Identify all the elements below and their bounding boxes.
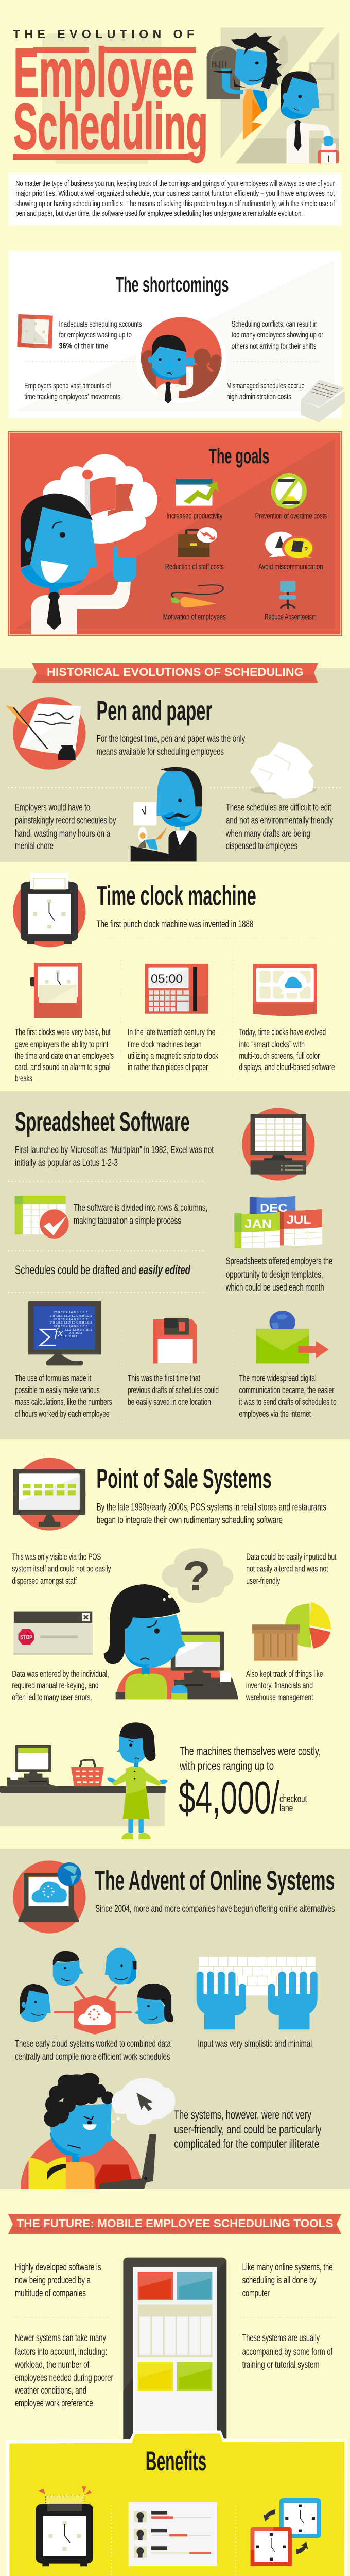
column: formulas: of hours worked by each employee	[15, 1409, 109, 1419]
column: first clocks: card, and sound an alarm to signal	[15, 1062, 111, 1072]
goal: reduction of staff costs: Reduction of staff costs	[165, 563, 224, 571]
intro text: spreadsheet	[15, 1145, 214, 1168]
intro text: pen and paper: For the longest time, pen and paper was the only	[97, 734, 246, 744]
goal: increased productivity: Increased productivity	[167, 512, 222, 521]
column: digital communication: employees via the internet	[239, 1409, 311, 1419]
goal: avoid miscommunication	[258, 532, 323, 571]
column: formulas: 12.9 12.4 14.8 9.8 8.7	[53, 1311, 87, 1314]
icon: tablet with tiles	[123, 2258, 226, 2501]
side text: pen and paper: Employers would have to	[15, 802, 90, 813]
section: point of sale systems	[0, 1458, 337, 1839]
side text: pen and paper	[15, 802, 333, 852]
shortcoming text blocks: Scheduling conflicts, can result in	[232, 320, 318, 329]
heading: pen and paper: Pen and paper	[96, 696, 212, 726]
column: digital communication	[239, 1311, 337, 1419]
illustration: users connected to cloud	[15, 1948, 173, 2062]
shortcoming text blocks	[24, 320, 323, 401]
panel: the goals	[8, 431, 342, 636]
goal: motivation of employees	[163, 585, 226, 622]
icon: stop dialog	[13, 1611, 93, 1655]
column: formulas: 7.8 10.1 11.2 12.9 9.8 10.1	[50, 1315, 92, 1318]
goal: motivation of employees: Motivation of employees	[163, 613, 226, 622]
text: machine costs: checkout	[279, 1793, 307, 1805]
text: right column: computer	[242, 2288, 270, 2299]
text: left column: Newer systems can take many	[15, 2333, 106, 2344]
text: rows and columns: making tabulation a simple process	[74, 1216, 181, 1227]
text: left column: employee work preference.	[15, 2398, 95, 2409]
text: POS drawbacks: inventory, financials and	[246, 1680, 313, 1690]
text: left column: Highly developed software is	[15, 2262, 101, 2273]
column: formulas: 11.2 10.1	[65, 1335, 77, 1338]
column: magnetic strip clocks: time clock machines began	[128, 1039, 202, 1049]
price callout: $4,000/	[179, 1772, 279, 1823]
column: first clocks: gave employers the ability to print	[15, 1039, 108, 1049]
text: POS drawbacks: Data was entered by the individual,	[12, 1669, 109, 1679]
shortcoming text blocks: for employees wasting up to	[59, 331, 132, 340]
column: magnetic strip clocks: 05:00	[151, 972, 183, 986]
intro text	[15, 179, 335, 218]
shortcoming text blocks: time tracking employees’ movements	[24, 393, 120, 401]
column: first clocks: the time and date on an employee’s	[15, 1050, 114, 1061]
text: left column	[14, 2262, 113, 2409]
heading: benefits: Benefits	[146, 2446, 206, 2477]
benefit: reduces unauthorized absences	[32, 2486, 98, 2576]
text: left column: employees needed during poorer	[15, 2372, 113, 2383]
section: time clock machine	[13, 873, 335, 1083]
text: left column: workload, the number of	[14, 2360, 90, 2370]
worker one	[213, 32, 282, 140]
intro text: pen and paper	[97, 734, 246, 757]
text: POS drawbacks: system itself and could not be easily	[12, 1564, 111, 1574]
side text: pen and paper: painstakingly record schedules by	[15, 815, 116, 826]
column: formulas: 12.9 12.4 14.8 9.8 8.7	[53, 1318, 87, 1321]
illustration: shrugging cashier at counter	[0, 1722, 168, 1839]
section: spreadsheet software	[8, 1107, 337, 1429]
banner: historical evolutions of scheduling: HISTORICAL EVOLUTIONS OF SCHEDULING	[47, 666, 304, 679]
side text: pen and paper: when many drafts are being	[225, 828, 310, 839]
shortcoming text blocks: Employers spend vast amounts of	[24, 382, 111, 391]
panel: the shortcomings	[8, 250, 345, 422]
goal: prevention of overtime costs	[255, 475, 327, 521]
shortcoming text blocks: high administration costs	[226, 393, 291, 401]
illustration: clerk at a desk	[130, 767, 202, 861]
illustration: man thinking of a flag	[21, 454, 157, 634]
text: templates	[225, 1256, 332, 1293]
column: magnetic strip clocks	[128, 964, 218, 1072]
text: not user-friendly	[174, 2108, 322, 2150]
heading: the shortcomings: The shortcomings	[116, 273, 229, 296]
text: left column: factors into account, including:	[15, 2347, 107, 2358]
shortcoming text blocks: Mismanaged schedules accrue	[226, 382, 305, 391]
column: formulas: fx	[55, 1326, 63, 1339]
text: POS drawbacks	[12, 1552, 337, 1702]
shortcoming text blocks: Inadequate scheduling accounts	[59, 320, 142, 329]
question mark: ?	[183, 1553, 211, 1600]
section: mobile tools	[13, 2258, 335, 2501]
text: POS drawbacks: warehouse management	[246, 1692, 313, 1702]
icon: table with checkmark	[15, 1196, 69, 1239]
time clock slab	[207, 46, 240, 99]
banner: historical evolutions of scheduling	[32, 663, 318, 683]
illustration: users connected to cloud: centrally and compile more efficient work schedules	[15, 2052, 170, 2062]
text: POS drawbacks: often led to many user errors.	[12, 1692, 92, 1702]
text: POS drawbacks: This was only visible via the POS	[12, 1552, 101, 1562]
text: right column	[242, 2262, 333, 2370]
icon: POS terminal	[13, 1458, 86, 1531]
intro text: spreadsheet: initially as popular as Lotus 1-2-3	[15, 1158, 118, 1168]
column: formulas: possible to easily make various	[15, 1385, 100, 1395]
column: saved drafts: previous drafts of schedules could	[128, 1385, 219, 1395]
heading: the goals: The goals	[209, 444, 270, 468]
illustration: frustrated user at laptop	[21, 2073, 175, 2189]
goal: reduce absenteeism: Reduce Absenteeism	[265, 613, 317, 622]
intro text: pen and paper: means available for scheduling employees	[97, 747, 224, 757]
illustration: pen-and-paper worker versus modern worker	[207, 27, 339, 163]
text: easily edited: Schedules could be drafted and easily edited	[15, 1263, 191, 1277]
column: formulas: 12.9 12.4 14.8 9.8 8.7	[53, 1325, 87, 1328]
side text: pen and paper: hand, wasting many hours on a	[15, 828, 110, 839]
goal: reduction of staff costs	[165, 527, 224, 571]
panel: introduction	[8, 172, 342, 226]
benefit: individual shift schedules	[126, 2502, 224, 2576]
side text: pen and paper: menial chore	[15, 841, 54, 852]
worker two	[281, 71, 339, 163]
column: first clocks: breaks	[15, 1073, 32, 1083]
intro text: spreadsheet: First launched by Microsoft as “Multiplan” in 1982, Excel was not	[15, 1145, 214, 1156]
text: POS drawbacks: user-friendly	[246, 1575, 280, 1586]
title kicker: THE EVOLUTION OF	[13, 27, 194, 41]
icon: worried worker in circle	[136, 314, 226, 403]
illustration: users connected to cloud: These early cloud systems worked to combined data	[15, 2039, 171, 2049]
goal: increased productivity	[167, 479, 222, 521]
column: smart clocks: into “smart clocks” with	[239, 1039, 305, 1049]
text: POS drawbacks: required manual re-keying, and	[12, 1680, 99, 1690]
shortcoming text blocks: others not arriving for their shifts	[232, 342, 316, 351]
goal: reduce absenteeism	[265, 581, 317, 622]
column: formulas: mass calculations, like the numbers	[15, 1397, 112, 1407]
icon: month calendars	[234, 1196, 322, 1249]
icon: month calendars: JUL	[286, 1213, 311, 1226]
column: saved drafts: This was the first time that	[128, 1373, 200, 1383]
goal: avoid miscommunication: Avoid miscommunication	[258, 563, 323, 571]
text: machine costs: with prices ranging up to	[179, 1759, 274, 1772]
column: formulas	[15, 1301, 112, 1419]
illustration: confused cashier with thought cloud	[104, 1548, 238, 1699]
intro text: time clock: The first punch clock machine was invented in 1888	[96, 919, 253, 930]
column: first clocks	[15, 963, 114, 1083]
icon: punch clock	[13, 873, 86, 947]
text: rows and columns	[74, 1202, 207, 1227]
column: formulas: 7.8 10.1 11.2 12.9 9.8 10.1	[50, 1321, 92, 1325]
icon: paper stack	[301, 380, 345, 422]
title main lines	[13, 35, 208, 163]
text: right column: scheduling is all done by	[242, 2275, 317, 2286]
icon: crumpled paper	[250, 742, 317, 799]
banner: the future	[8, 2214, 341, 2234]
section: the advent of online systems	[13, 1860, 335, 2189]
title main lines: Employee	[13, 35, 194, 111]
watermark: clock behind title	[42, 33, 162, 164]
text: left column: multitude of companies	[15, 2288, 86, 2299]
text: machine costs: lane	[279, 1803, 293, 1814]
panel: benefits folder	[6, 2431, 347, 2576]
column: formulas: 11.2 12.9 9.8 10.1	[65, 1329, 92, 1332]
icon: desktop computer with spreadsheet	[242, 1108, 315, 1181]
benefit: trade shifts	[246, 2498, 325, 2576]
text: right column: training or tutorial system	[242, 2360, 320, 2370]
illustration: hands on keyboard	[197, 1957, 318, 2049]
intro text: POS	[97, 1502, 326, 1526]
text: left column: weather conditions, and	[14, 2385, 86, 2396]
column: magnetic strip clocks: In the late twentieth century the	[128, 1027, 215, 1037]
text: POS drawbacks: dispersed amongst staff	[12, 1575, 77, 1586]
icon: crate and pie chart	[252, 1602, 331, 1661]
icon: month calendars: JAN	[244, 1217, 272, 1230]
column: smart clocks	[239, 964, 335, 1072]
column: saved drafts	[128, 1318, 219, 1407]
section: pen and paper	[6, 696, 341, 861]
column: formulas: 7.8 10.1	[69, 1332, 82, 1335]
column: digital communication: The more widespread digital	[239, 1373, 317, 1383]
shortcoming text blocks: 36% of their time	[59, 342, 108, 351]
column: magnetic strip clocks: in rather than pieces of paper	[128, 1062, 208, 1072]
text: machine costs	[179, 1744, 321, 1823]
column: saved drafts: be easily saved in one location	[128, 1397, 211, 1407]
column: first clocks: The first clocks were very basic, but	[15, 1027, 111, 1037]
icon: month calendars: DEC	[260, 1201, 288, 1214]
heading: time clock machine: Time clock machine	[97, 881, 256, 911]
title	[13, 27, 208, 163]
icon: quill, letter and ink	[6, 697, 86, 770]
column: magnetic strip clocks: utilizing a magnetic strip to clock	[128, 1050, 218, 1061]
icon: red clock	[17, 314, 53, 349]
heading: spreadsheet software: Spreadsheet Software	[15, 1107, 190, 1138]
goal: avoid miscommunication: ?	[304, 546, 308, 553]
banner: the future: THE FUTURE: MOBILE EMPLOYEE SCHEDULING TOOLS	[16, 2217, 333, 2230]
text: left column: now being produced by a	[15, 2275, 91, 2286]
column: formulas: The use of formulas made it	[15, 1373, 91, 1383]
side text: pen and paper: dispensed to employees	[226, 841, 297, 852]
icon: stop dialog: STOP	[20, 1633, 32, 1641]
icon: laptop with cloud and globe	[13, 1860, 86, 1934]
text: rows and columns: The software is divided into rows & columns,	[74, 1202, 207, 1213]
